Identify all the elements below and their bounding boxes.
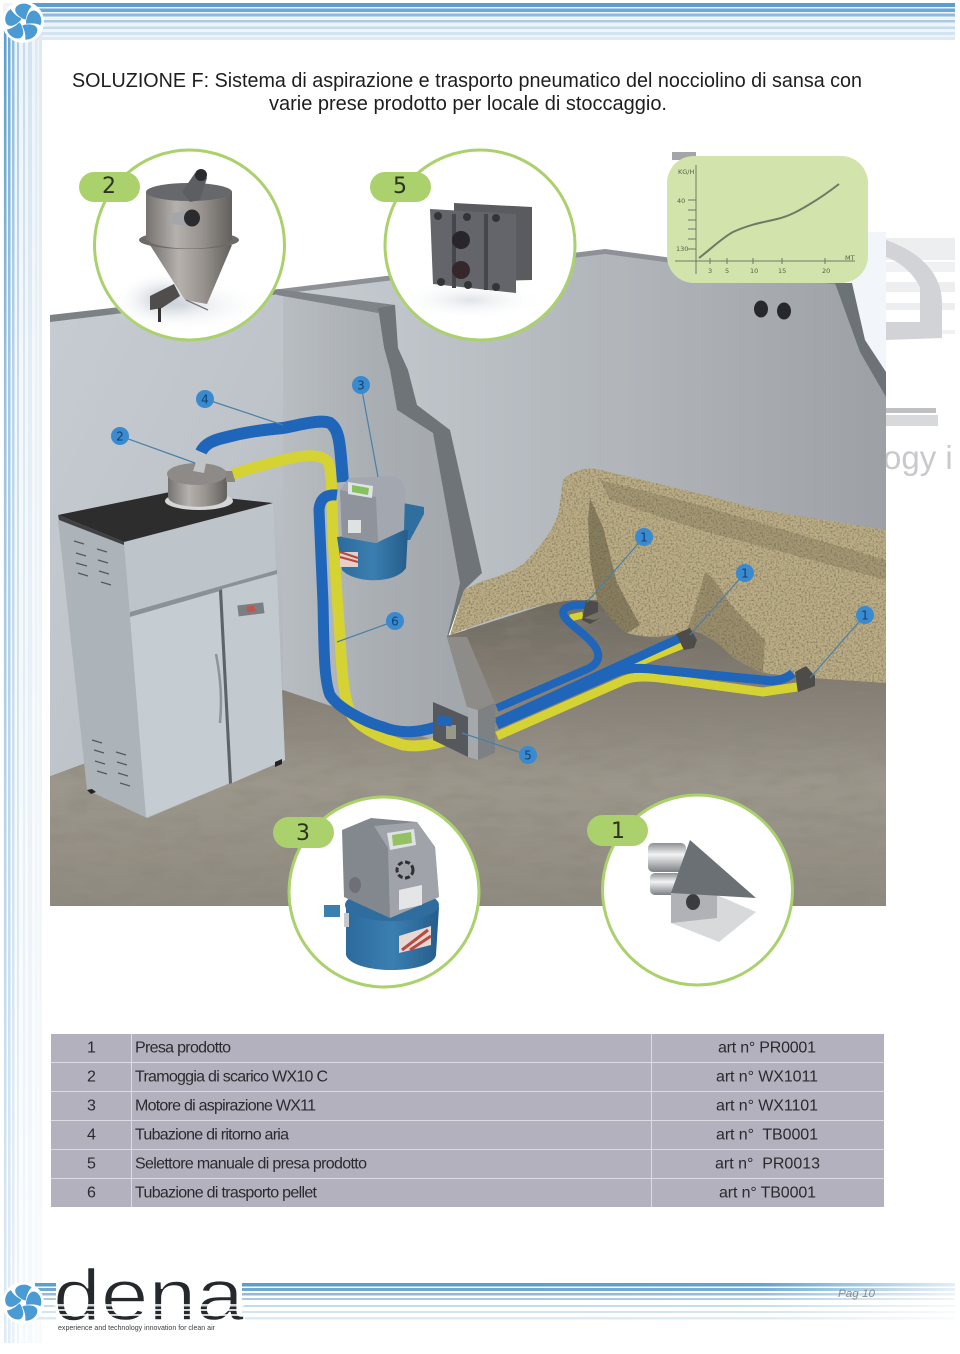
row 3: art n° WX1101 <box>716 1098 818 1114</box>
panel: product intake detail (1) <box>602 795 792 985</box>
row 4: Tubazione di ritorno aria <box>135 1126 289 1144</box>
faint background logo, right edge <box>850 232 955 482</box>
badge: 2 <box>79 172 140 202</box>
callout badges: 6 <box>391 614 399 628</box>
row 6 <box>87 1184 816 1202</box>
panel: performance chart: 20 <box>822 267 830 275</box>
callout badges: 1 <box>861 608 869 622</box>
badge: 1 <box>587 815 648 846</box>
cabinet <box>58 492 285 818</box>
right wall <box>605 254 886 530</box>
row 4: art n° TB0001 <box>716 1126 818 1144</box>
panel: performance chart: 5 <box>725 267 729 275</box>
icon: fan logo, top left <box>2 1 44 43</box>
callout badges: 5 <box>524 748 532 762</box>
parts table <box>51 1034 884 1207</box>
product intakes <box>582 600 815 692</box>
row 2: 2 <box>87 1068 96 1086</box>
panel: hopper detail (2) <box>94 150 284 340</box>
row 2: Tramoggia di scarico WX10 C <box>135 1068 328 1086</box>
panel: performance chart: 40 <box>677 197 685 205</box>
callout badges: 1 <box>741 566 749 580</box>
leader lines <box>120 385 865 755</box>
left wall top edge <box>50 289 280 322</box>
callout badges: 3 <box>357 378 365 392</box>
row 2 <box>87 1068 818 1086</box>
row 6: art n° TB0001 <box>719 1184 816 1202</box>
row 2: art n° WX1011 <box>716 1068 818 1086</box>
row 5: art n° PR0013 <box>715 1156 820 1172</box>
row 6: Tubazione di trasporto pellet <box>135 1184 318 1202</box>
badge: 3 <box>273 817 334 848</box>
badge: 1: 1 <box>611 819 625 844</box>
motor unit on wall <box>337 476 424 580</box>
panel: performance chart: 15 <box>778 267 786 275</box>
right wall top edge <box>605 249 886 397</box>
pipe: blue return line, upper <box>201 422 343 482</box>
panel: performance chart: MT <box>845 254 855 262</box>
pipe: yellow transport line, left <box>233 456 452 746</box>
centre wall jagged edge <box>277 289 495 760</box>
row 3: Motore di aspirazione WX11 <box>135 1098 316 1114</box>
icon: fan logo, footer <box>2 1282 44 1324</box>
callout badges: 4 <box>201 392 209 406</box>
hopper on cabinet <box>165 463 235 510</box>
panel: motor detail (3) <box>289 797 479 987</box>
pipes: right branches <box>497 605 797 736</box>
panel: performance chart <box>667 152 868 283</box>
panel: performance chart: 10 <box>750 267 758 275</box>
badge: 3: 3 <box>296 821 310 846</box>
row 3: 3 <box>87 1098 96 1114</box>
left wall <box>50 292 283 776</box>
page number: Pag 10 <box>838 1288 876 1300</box>
row 1: art n° PR0001 <box>718 1040 816 1056</box>
badge: 2: 2 <box>102 174 116 199</box>
faint background logo, right edge: ogy i <box>883 439 953 476</box>
title: varie prese prodotto per locale di stoccaggio. <box>269 93 667 115</box>
panel: performance chart: KG/H <box>678 168 694 176</box>
row 3 <box>87 1098 818 1114</box>
row 1: 1 <box>87 1040 96 1056</box>
title <box>72 70 862 115</box>
centre wall <box>283 294 468 757</box>
badge: 5 <box>370 172 431 202</box>
floor <box>50 590 886 906</box>
title: SOLUZIONE F: Sistema di aspirazione e trasporto pneumatico del nocciolino di sansa con <box>72 70 862 92</box>
logo: dena: dena <box>53 1256 245 1336</box>
logo: dena: experience and technology innovation for clean air <box>58 1323 215 1332</box>
manual selector on wall <box>433 702 468 757</box>
sand pile <box>450 469 886 683</box>
row 4: 4 <box>87 1126 96 1144</box>
row 1 <box>87 1040 816 1056</box>
row 5: 5 <box>87 1156 96 1172</box>
row 5: Selettore manuale di presa prodotto <box>135 1156 367 1172</box>
panel: performance chart: 130 <box>676 245 688 253</box>
back wall top edge <box>280 249 605 294</box>
callout badges <box>111 376 874 764</box>
row 6: 6 <box>87 1184 96 1202</box>
3D scene illustration <box>50 249 886 906</box>
row 4 <box>87 1126 818 1144</box>
pipe: blue line, left down <box>319 495 450 732</box>
callout badges: 2 <box>116 430 124 444</box>
panel: performance chart: 3 <box>708 267 712 275</box>
row 5 <box>87 1156 820 1172</box>
panel: selector detail (5) <box>385 150 575 340</box>
callout badges: 1 <box>640 530 648 544</box>
footer stripes <box>35 1280 960 1322</box>
back wall <box>298 254 605 630</box>
badge: 5: 5 <box>393 174 407 199</box>
row 1: Presa prodotto <box>135 1040 231 1056</box>
